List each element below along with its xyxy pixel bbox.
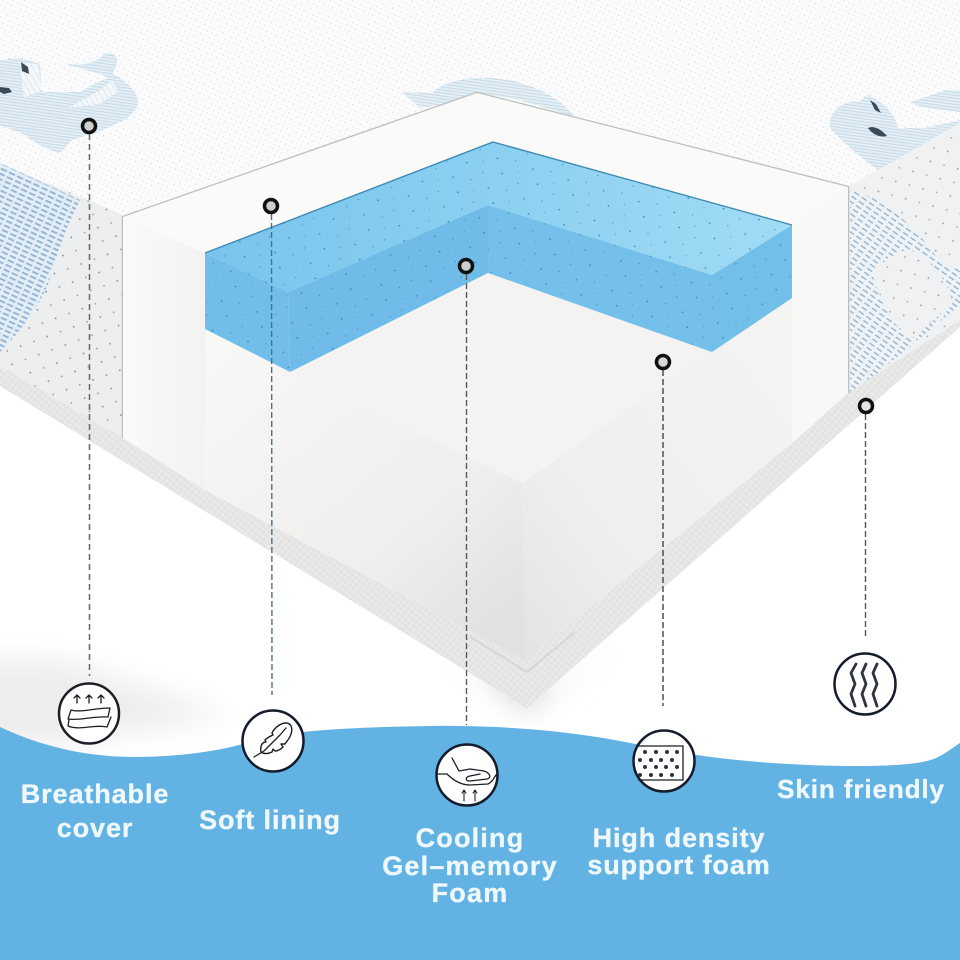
blue wave footer bbox=[0, 726, 960, 960]
cut edge line bbox=[123, 93, 848, 438]
label: cooling gel-memory foam: Cooling bbox=[416, 823, 524, 853]
foam layer: white top wall bbox=[123, 93, 848, 253]
whale eye marks bbox=[0, 62, 887, 137]
callout: breathable cover leader bbox=[82, 120, 96, 676]
label: breathable cover: Breathable bbox=[21, 779, 169, 809]
right side cover panel bbox=[848, 123, 960, 393]
gel memory foam block bbox=[205, 142, 792, 372]
whale print: centre bbox=[402, 78, 575, 117]
whale print: left bbox=[0, 53, 138, 153]
label: high density support foam: support foam bbox=[587, 850, 771, 880]
label: high density support foam: High density bbox=[593, 823, 765, 853]
label: breathable cover: cover bbox=[57, 813, 133, 843]
left side cover pattern bbox=[0, 163, 80, 352]
callout: soft lining leader bbox=[264, 200, 278, 695]
whale print: right bbox=[830, 90, 960, 172]
gel foam: left cut face bbox=[205, 253, 290, 372]
label: skin friendly: Skin friendly bbox=[777, 774, 945, 804]
support foam: right face bbox=[523, 297, 792, 660]
right side cover pattern bbox=[850, 190, 960, 393]
icon: dense foam bbox=[634, 730, 694, 792]
icon: skin friendly waves bbox=[834, 654, 896, 714]
label: cooling gel-memory foam: Foam bbox=[432, 878, 508, 908]
support foam: top floor bbox=[290, 273, 792, 483]
callout: gel foam leader bbox=[460, 260, 472, 725]
band inner ridge bbox=[470, 632, 575, 672]
icon: breathable layers bbox=[59, 684, 119, 744]
mattress top surface bbox=[0, 0, 960, 217]
gel foam: inner right face bbox=[488, 205, 712, 352]
ground shadow bbox=[0, 650, 600, 745]
cover underside band bbox=[0, 320, 960, 708]
callout: support foam leader bbox=[656, 356, 670, 706]
gel foam: dark top edge bbox=[205, 142, 792, 253]
support foam: left face bbox=[205, 329, 525, 660]
gel foam: end face bbox=[712, 225, 792, 352]
foam layer: white right wall bbox=[792, 187, 848, 443]
gel foam: inner left face bbox=[288, 205, 488, 372]
label: cooling gel-memory foam: Gel–memory bbox=[382, 851, 558, 881]
icon: feather bbox=[242, 710, 304, 772]
label: soft lining: Soft lining bbox=[199, 805, 341, 835]
foam layer: white left wall bbox=[123, 217, 205, 490]
icon: body on gel foam bbox=[436, 744, 498, 806]
left side cover panel bbox=[0, 163, 123, 438]
gel foam: top face bbox=[205, 142, 792, 292]
callout: skin friendly leader bbox=[860, 400, 872, 637]
gel foam: speckle texture bbox=[205, 142, 792, 372]
